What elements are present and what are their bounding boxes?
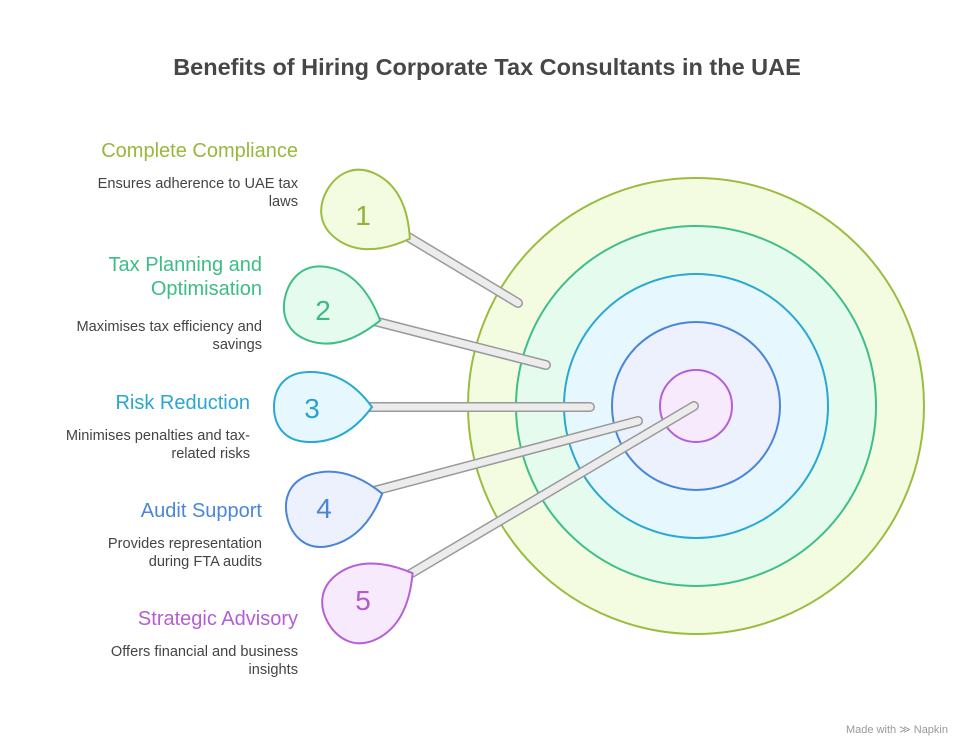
dart 5	[309, 406, 694, 656]
text: tax planning: savings	[213, 337, 262, 353]
text: risk reduction	[66, 392, 250, 462]
text: audit support	[108, 500, 262, 570]
dart 2	[276, 258, 546, 365]
text: strategic advisory: Strategic Advisory	[138, 608, 298, 630]
dart 1	[308, 157, 518, 303]
dart 4	[278, 421, 638, 555]
text: risk reduction: Risk Reduction	[115, 392, 250, 414]
dart 3: 3	[304, 393, 320, 424]
text: audit support: during FTA audits	[149, 554, 262, 570]
dart 4: 4	[316, 493, 332, 524]
text: complete compliance	[98, 140, 299, 210]
text: tax planning: Tax Planning and	[109, 254, 262, 276]
text: complete compliance: Ensures adherence to UAE tax	[98, 176, 299, 192]
text: complete compliance: laws	[269, 194, 298, 210]
title: Benefits of Hiring Corporate Tax Consultants in the UAE	[173, 54, 801, 80]
text: strategic advisory: insights	[249, 662, 298, 678]
text: tax planning: Optimisation	[151, 278, 262, 300]
dart 3	[274, 372, 590, 442]
text: audit support: Provides representation	[108, 536, 262, 552]
footer credit: Made with ≫ Napkin	[846, 724, 948, 736]
text: tax planning: Maximises tax efficiency and	[77, 319, 262, 335]
text: tax planning	[77, 254, 262, 353]
text: risk reduction: Minimises penalties and tax-	[66, 428, 250, 444]
dart 2: 2	[315, 295, 331, 326]
text: complete compliance: Complete Compliance	[101, 140, 298, 162]
text: audit support: Audit Support	[141, 500, 262, 522]
text: risk reduction: related risks	[171, 446, 250, 462]
text: strategic advisory: Offers financial and business	[111, 644, 298, 660]
dart 1: 1	[355, 200, 371, 231]
text: strategic advisory	[111, 608, 298, 678]
target	[468, 178, 924, 634]
dart 5: 5	[355, 585, 371, 616]
